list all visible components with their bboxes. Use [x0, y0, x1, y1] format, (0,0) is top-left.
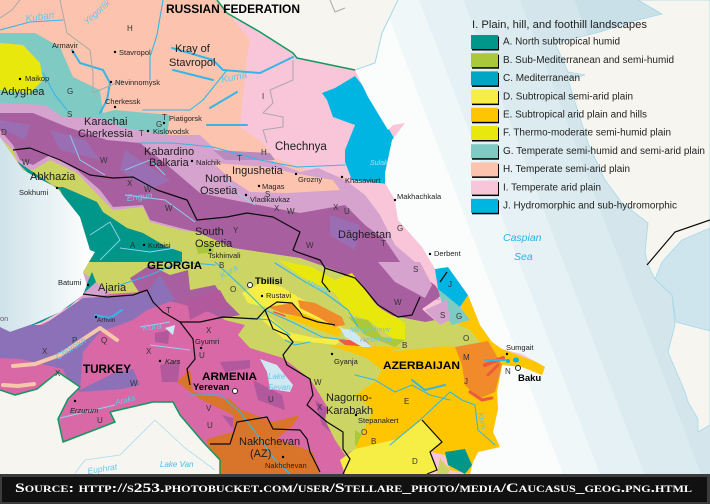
cities: Kutaisi: [148, 241, 171, 250]
cities: Vladikavkaz: [250, 195, 290, 204]
cities: Kislovodsk: [153, 127, 189, 136]
landscape letter codes: U: [344, 207, 350, 216]
legend row H: H. Temperate semi-arid plain: [503, 164, 630, 175]
purple ridge south Georgia: [130, 265, 240, 318]
region names: Karachai: [84, 116, 127, 128]
landscape letter codes: X: [42, 347, 48, 356]
region names: Chechnya: [275, 141, 327, 153]
region M: orange: [298, 300, 345, 327]
dark mauve patches: [155, 290, 332, 433]
landscape letter codes: W: [144, 185, 152, 194]
legend row B: B. Sub-Mediterranean and semi-humid: [503, 55, 674, 66]
legend row D: D. Subtropical semi-arid plain: [503, 91, 633, 102]
legend row G: [471, 144, 705, 160]
water body names: Sulak: [370, 160, 388, 167]
region names: Balkaria: [149, 157, 190, 169]
landscape letter codes: M: [463, 353, 470, 362]
landscape letter codes: W: [314, 378, 322, 387]
salmon highland patches: [3, 328, 117, 386]
landscape letter codes: J: [464, 377, 468, 386]
region names: Ossetia: [200, 185, 238, 197]
landscape letter codes: J: [448, 280, 452, 289]
Chechnya lowland I: [240, 94, 336, 176]
region W: mountain purple: [0, 113, 448, 332]
landscape letter codes: G: [156, 120, 162, 129]
landscape letter codes: W: [22, 158, 30, 167]
legend row I: I. Temperate arid plain: [503, 182, 601, 193]
Lake Sevan: [260, 359, 293, 392]
landscape letter codes: N: [505, 367, 511, 376]
landscape letter codes: S: [265, 190, 270, 199]
legend row E: [471, 108, 647, 123]
region names: (AZ): [250, 448, 271, 460]
landscape letter codes: D: [1, 128, 7, 137]
landscape letter codes: X: [55, 369, 61, 378]
legend row I: [471, 181, 601, 196]
cities: Makhachkala: [397, 192, 442, 201]
international black borders: [13, 148, 447, 474]
cities: Piatigorsk: [169, 114, 202, 123]
country names: [83, 2, 460, 383]
capital cities: [193, 276, 541, 394]
region names: Kray of: [175, 43, 211, 55]
Karabakh B: [355, 430, 376, 448]
landscape letter codes: G: [67, 87, 73, 96]
landscape letter codes: Q: [101, 336, 107, 345]
landscape letter codes: H: [261, 148, 267, 157]
landscape letter codes: D: [412, 457, 418, 466]
cities: Khasaviurt: [345, 176, 381, 185]
landscape letter codes: X: [274, 204, 280, 213]
Mingechevir Reservoir: [340, 328, 372, 347]
region N: red accents: [274, 312, 503, 400]
region B: central Georgia: [196, 243, 214, 254]
water body names: Reservoir: [360, 335, 393, 344]
water body names: [25, 0, 542, 476]
landscape letter codes: T: [139, 129, 144, 138]
cities: [0, 41, 534, 470]
landscape letter codes: T: [237, 154, 242, 163]
Caspian Sea: [355, 0, 710, 474]
landscape letter codes: G: [397, 224, 403, 233]
cities: Armavir: [52, 41, 78, 50]
landscape letter codes: I: [262, 92, 264, 101]
region names: [1, 43, 391, 460]
region J north: [322, 76, 395, 184]
landscape letter codes: X: [206, 326, 212, 335]
landscape letter codes: U: [268, 395, 274, 404]
cities: Arhvin: [97, 317, 116, 324]
landscape letter codes: W: [130, 379, 138, 388]
legend row J: [471, 199, 677, 214]
region D: semi-arid plain Tbilisi: [242, 282, 342, 328]
legend row F: [471, 126, 671, 142]
landscape letter codes: H: [127, 24, 133, 33]
cities: Nalchik: [196, 158, 221, 167]
legend row D: [471, 90, 633, 105]
cities: Nevinnomysk: [115, 78, 160, 87]
landscape letter codes: O: [361, 428, 367, 437]
legend row A: A. North subtropical humid: [503, 37, 620, 48]
landscape letter codes: B: [371, 437, 376, 446]
water body names: Lake: [268, 372, 286, 381]
water body names: Euphrat: [87, 461, 118, 476]
legend row J: J. Hydromorphic and sub-hydromorphic: [503, 200, 677, 212]
cities: Magas: [262, 182, 285, 191]
landscape letter codes: W: [306, 241, 314, 250]
water body names: Sea: [514, 251, 533, 263]
region F: thermo-moderate plain north: [0, 43, 43, 93]
landscape letter codes: W: [287, 207, 295, 216]
water body names: Lake Van: [160, 460, 194, 469]
region H: temperate semi-arid plain: [0, 0, 345, 200]
water body names: Kura: [218, 263, 239, 281]
water body names: Engun: [126, 190, 153, 203]
region F: Kura strip: [278, 260, 405, 343]
water body names: Caspian: [503, 232, 542, 244]
capital cities: Tbilisi: [255, 276, 282, 287]
eastern shore land: [555, 0, 710, 432]
cities: Rustavi: [266, 291, 291, 300]
landscape letter codes: P: [72, 336, 77, 345]
landscape letter codes: S: [413, 265, 418, 274]
region O: sub-humid plain: [2, 140, 458, 452]
landscape letter codes: U: [207, 421, 213, 430]
region G and S Azerbaijan: [438, 289, 470, 325]
legend: [471, 19, 705, 214]
region names: Nagorno-: [326, 392, 372, 404]
region A: north subtropical humid coast: [17, 161, 182, 262]
cities: Sokhumi: [19, 188, 49, 197]
landscape letter codes: G: [456, 312, 462, 321]
landscape letter codes: W: [394, 298, 402, 307]
region E: arid plains: [328, 295, 550, 474]
landscape letter codes: B: [219, 261, 224, 270]
water body names: Chorokh: [54, 335, 88, 362]
water body names: Sevan: [268, 383, 291, 392]
legend row A: [471, 35, 620, 50]
cities: Nakhchevan: [265, 461, 307, 470]
legend row G: G. Temperate semi-humid and semi-arid plain: [503, 146, 705, 157]
region J south: [435, 267, 468, 307]
country names: GEORGIA: [147, 260, 202, 272]
landscape letter codes: X: [146, 347, 152, 356]
landscape letter codes: [1, 24, 511, 466]
legend row E: E. Subtropical arid plain and hills: [503, 110, 647, 120]
rivers: [0, 0, 505, 474]
landscape letter codes: W: [165, 204, 173, 213]
region names: Dāghestan: [338, 229, 391, 241]
landscape letter codes: X: [317, 403, 323, 412]
region V: brown Ararat plain: [177, 369, 320, 474]
O south-east: [437, 458, 450, 474]
water body names: Araks: [113, 393, 136, 407]
landscape letter codes: O: [463, 334, 469, 343]
region S: mauve foothills: [0, 103, 440, 300]
country names: ARMENIA: [202, 371, 257, 383]
landscape letter codes: E: [404, 397, 409, 406]
region D: southern plain: [340, 420, 442, 474]
landscape letter codes: S: [440, 311, 445, 320]
region names: Abkhazia: [30, 171, 76, 183]
legend row F: F. Thermo-moderate semi-humid plain: [503, 128, 671, 139]
landscape letter codes: T: [166, 306, 171, 315]
lakes near Baku: [165, 325, 519, 363]
landscape letter codes: U: [199, 351, 205, 360]
legend row C: C. Mediterranean: [503, 73, 580, 84]
cities: Maikop: [25, 74, 49, 83]
region B: Mingechevir: [348, 317, 405, 347]
landscape letter codes: S: [67, 110, 72, 119]
Russian federal district boundaries: [0, 0, 345, 143]
region names: Stavropol: [169, 57, 215, 69]
water body names: Mingechevir: [350, 325, 391, 334]
landscape letter codes: A: [130, 241, 136, 250]
landscape letter codes: X: [333, 203, 339, 212]
water body names: Kuma: [220, 70, 249, 86]
darker ridge patches: [0, 120, 360, 250]
source caption bar: Source: http://s253.photobucket.com/user/Stellare_photo/media/Caucasus_geog.png.html: [15, 480, 692, 495]
region names: Cherkessia: [78, 128, 134, 140]
Turkish blue-violet highlands: [0, 275, 175, 392]
landscape letter codes: V: [206, 404, 212, 413]
source caption bar: [0, 474, 710, 504]
region names: Kabardino: [144, 146, 194, 158]
international green borders: [0, 0, 355, 474]
region names: Nakhchevan: [239, 436, 300, 448]
cities: Cherkessk: [105, 97, 141, 106]
cities: Stepanakert: [358, 416, 399, 425]
region A: Lankaran: [445, 449, 472, 474]
landscape letter codes: U: [97, 416, 103, 425]
region O east Azerbaijan: [425, 320, 480, 347]
country names: AZERBAIJAN: [383, 360, 460, 372]
legend row H: [471, 162, 630, 178]
water body names: Kuban: [25, 10, 55, 25]
cities: Tskhinvali: [208, 251, 241, 260]
landscape regions: [0, 0, 560, 474]
cities: Gyanja: [334, 357, 359, 366]
legend row C: [471, 71, 580, 87]
region X: pink highlands: [0, 292, 355, 474]
cities: Gyumri: [195, 337, 220, 346]
landscape letter codes: O: [230, 285, 236, 294]
country names: RUSSIAN FEDERATION: [166, 2, 300, 16]
region names: North: [205, 173, 232, 185]
Black Sea: [0, 130, 100, 335]
water body names: Kura: [476, 412, 488, 430]
country names: TURKEY: [83, 362, 131, 376]
cities: Batumi: [58, 278, 82, 287]
region G: temperate semi-humid: [0, 33, 170, 135]
water body names: Kura: [142, 320, 162, 333]
region names: Ingushetia: [232, 165, 284, 177]
cities: Erzurum: [70, 406, 98, 415]
landscape letter codes: Y: [233, 226, 239, 235]
lighter mauve in Dagestan: [378, 262, 432, 298]
cities: Kars: [165, 357, 181, 366]
region names: South: [195, 226, 224, 238]
cities: Sumgait: [506, 343, 534, 352]
region names: Ajaria: [98, 282, 127, 294]
cities: Grozny: [298, 175, 322, 184]
cities: Stavropol: [119, 48, 151, 57]
cities: on: [0, 314, 8, 323]
region names: Karabakh: [326, 405, 373, 417]
legend row B: [471, 53, 674, 69]
cities: Derbent: [434, 249, 462, 258]
Grozny plain H: [213, 163, 340, 193]
landscape letter codes: T: [381, 239, 386, 248]
capital cities: Yerevan: [193, 382, 230, 393]
landscape letter codes: T: [162, 113, 167, 122]
capital cities: Baku: [518, 373, 541, 384]
region names: Ossetia: [195, 238, 233, 250]
streak and Grozny plain: [213, 150, 275, 160]
landscape letter codes: X: [127, 179, 133, 188]
water south of the border: [75, 420, 215, 473]
region names: Adyghea: [1, 86, 45, 98]
water body names: Alazani: [303, 277, 331, 295]
landscape letter codes: B: [402, 341, 407, 350]
legend title: I. Plain, hill, and foothill landscapes: [472, 19, 648, 31]
Karabakh highland O: [325, 408, 352, 455]
landscape letter codes: W: [100, 156, 108, 165]
